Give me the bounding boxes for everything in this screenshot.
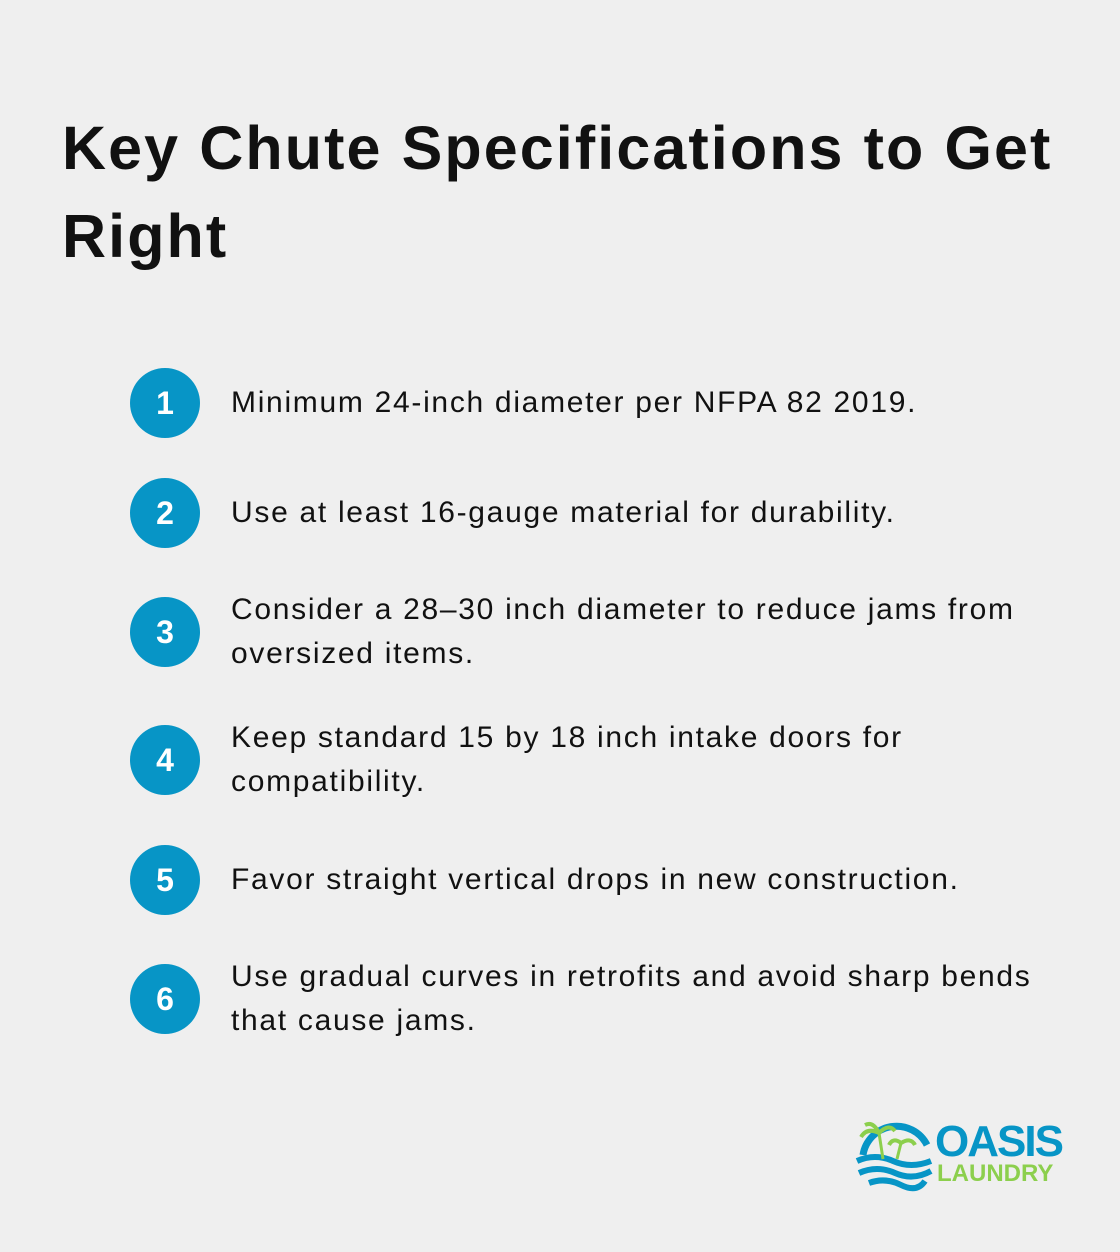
item 1: 1 bbox=[156, 385, 174, 421]
item 3: 3 bbox=[156, 614, 174, 650]
item 5: Favor straight vertical drops in new construction. bbox=[231, 863, 960, 896]
item 6: Use gradual curves in retrofits and avoid sharp bends that cause jams. bbox=[231, 960, 1032, 1037]
logo: OASIS bbox=[935, 1117, 1062, 1166]
item 1: Minimum 24-inch diameter per NFPA 82 2019. bbox=[231, 386, 917, 419]
item 1 bbox=[130, 368, 917, 438]
item 5 bbox=[130, 845, 960, 915]
logo bbox=[856, 1117, 1062, 1192]
item 2: 2 bbox=[156, 495, 174, 531]
item 2 bbox=[130, 478, 896, 548]
title: Key Chute Specifications to Get Right bbox=[62, 114, 1052, 270]
logo: LAUNDRY bbox=[937, 1160, 1053, 1187]
item 5: 5 bbox=[156, 862, 174, 898]
item 6: 6 bbox=[156, 981, 174, 1017]
item 4: 4 bbox=[156, 742, 174, 778]
item 2: Use at least 16-gauge material for durability. bbox=[231, 496, 896, 529]
item 4: Keep standard 15 by 18 inch intake doors for compatibility. bbox=[231, 721, 903, 798]
item 3: Consider a 28–30 inch diameter to reduce jams from oversized items. bbox=[231, 593, 1015, 670]
